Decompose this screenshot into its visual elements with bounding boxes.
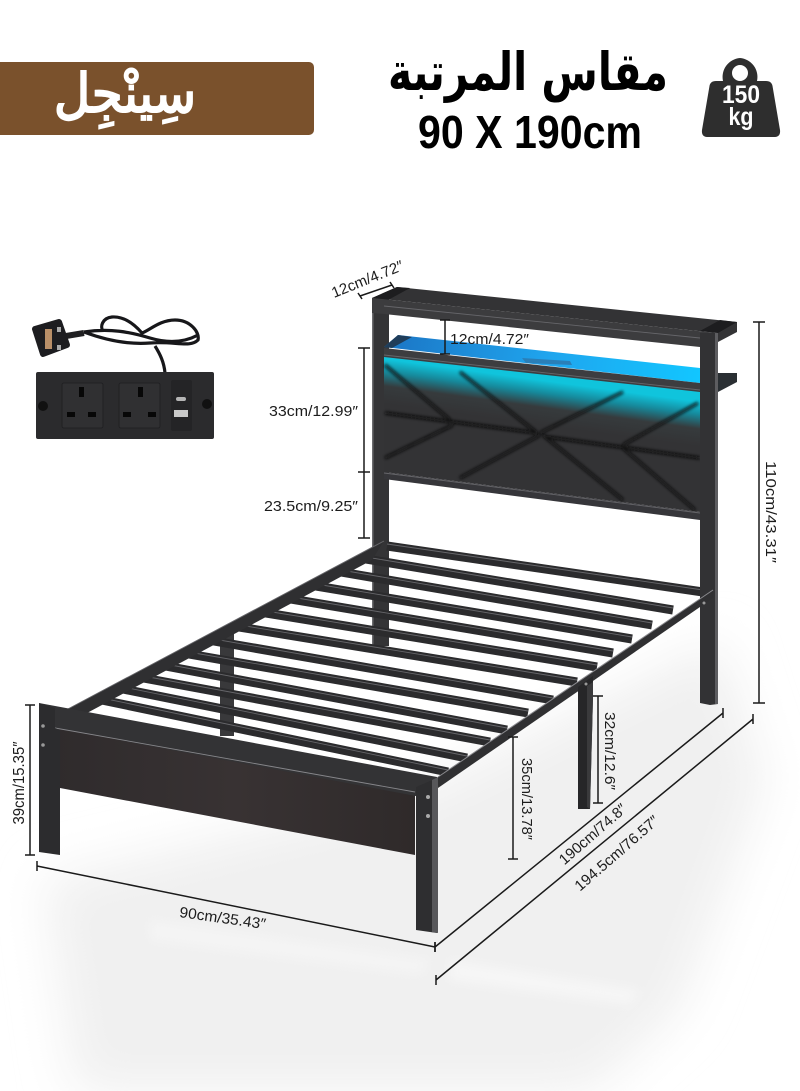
dimension: 32cm leg <box>593 696 618 803</box>
upholstered headboard panel <box>384 348 700 520</box>
dimension: 35cm clearance: 35cm/13.78″ <box>518 758 535 841</box>
badge: bed size label: سِينْجِل <box>54 63 196 130</box>
right headboard post and right rail <box>438 333 718 809</box>
bed frame <box>39 287 737 933</box>
icon: 150 kg weight: kg <box>728 103 754 131</box>
back legs behind slats <box>220 298 389 736</box>
dimension: shelf gap 12cm: 12cm/4.72″ <box>450 331 530 348</box>
dimension: shelf gap 12cm <box>440 320 530 354</box>
dimension: 39cm <box>11 705 35 855</box>
dimension: shelf depth 12cm: 12cm/4.72″ <box>329 257 407 302</box>
slats <box>97 544 703 772</box>
dimension: 33cm and 23.5cm: 23.5cm/9.25″ <box>264 498 359 515</box>
dimension: length 194.5cm <box>436 714 753 985</box>
floor reflection <box>45 640 765 1091</box>
badge: bed size label <box>0 62 314 135</box>
power strip with plug <box>35 317 214 439</box>
left side rail <box>62 541 384 720</box>
headboard shelf top <box>372 287 737 348</box>
icon: 150 kg weight: 150 <box>722 81 760 109</box>
heading: mattress size: 90 X 190cm <box>418 106 642 158</box>
dimension: height 110cm: 110cm/43.31″ <box>762 461 779 564</box>
icon: 150 kg weight <box>702 58 780 137</box>
dimension: height 110cm <box>753 322 779 703</box>
dimension: length 190cm: 190cm/74.8″ <box>556 800 631 869</box>
heading: mattress size <box>388 42 668 158</box>
dimension: 33cm and 23.5cm <box>264 348 370 538</box>
dimension: width 90cm <box>37 861 435 952</box>
footboard <box>39 703 438 933</box>
dimension: width 90cm: 90cm/35.43″ <box>178 904 268 933</box>
plug <box>35 322 67 354</box>
dimension: length 190cm <box>435 708 723 952</box>
dimension: length 194.5cm: 194.5cm/76.57″ <box>571 812 663 895</box>
dimension: 35cm clearance <box>508 737 535 859</box>
heading: mattress size: مقاس المرتبة <box>388 42 668 103</box>
dimension: 39cm: 39cm/15.35″ <box>11 741 28 824</box>
dimension: 32cm leg: 32cm/12.6″ <box>601 712 618 791</box>
strip body <box>36 372 214 439</box>
illuminated lower shelf <box>384 335 737 392</box>
dimension: 33cm and 23.5cm: 33cm/12.99″ <box>269 403 359 420</box>
